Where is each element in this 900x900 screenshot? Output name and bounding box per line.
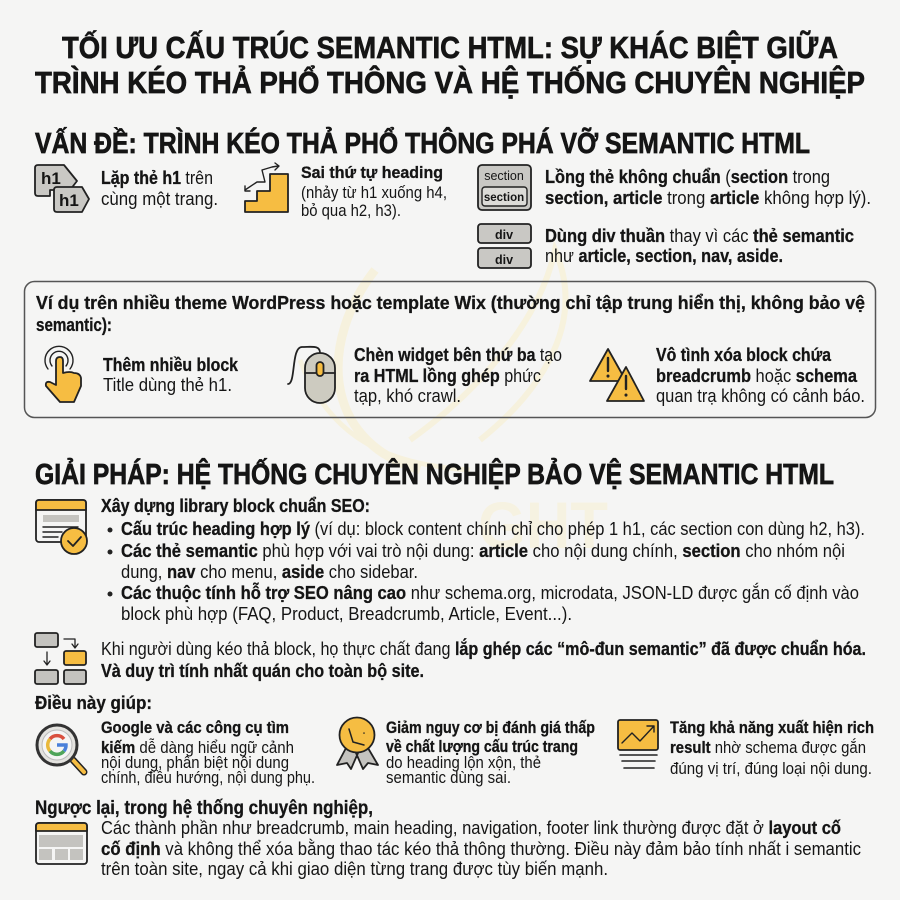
text: SEO block library: Các thẻ semantic phù hợp với vai trò nội dung: article cho nội dung chính, section cho nhóm nội bbox=[121, 541, 845, 561]
text: plain div: Dùng div thuần thay vì các thẻ semantic bbox=[545, 226, 854, 246]
icon: stairs bbox=[245, 163, 288, 212]
text: fixed layout explanation: Các thành phần như breadcrumb, main heading, navigation, footer link thường được đặt ở layout cố bbox=[101, 818, 841, 838]
text: wrong heading order: Sai thứ tự heading bbox=[301, 164, 443, 182]
text: repeated h1 bbox=[101, 168, 218, 209]
icon: duplicate h1 tags: h1 bbox=[59, 191, 79, 210]
icon: google magnifier bbox=[37, 725, 84, 772]
text: accidental delete: Vô tình xóa block chứa bbox=[656, 345, 832, 365]
icon: ribbon badge bbox=[337, 718, 378, 769]
icon: window with check bbox=[36, 500, 87, 554]
text: third-party widgets: Chèn widget bên thứ ba tạo bbox=[354, 345, 562, 365]
text: rich results: result nhờ schema được gắn bbox=[670, 738, 866, 757]
text: nesting bbox=[545, 167, 871, 208]
text: SEO block library: Cấu trúc heading hợp lý (ví dụ: block content chính chỉ cho phép 1 h1, các section con dùng h2, h3). bbox=[121, 519, 865, 539]
text: reduce risk: về chất lượng cấu trúc trang bbox=[386, 738, 578, 756]
icon: duplicate h1 tags bbox=[35, 165, 89, 212]
title bbox=[35, 29, 865, 100]
icon: mouse bbox=[288, 347, 335, 403]
text: accidental delete: breadcrumb hoặc schema bbox=[656, 366, 858, 386]
icon: tapping hand bbox=[45, 346, 81, 402]
text: rich results: Tăng khả năng xuất hiện rich bbox=[670, 719, 874, 737]
text: add blocks: Thêm nhiều block bbox=[103, 355, 239, 375]
icon: div boxes: div bbox=[495, 253, 513, 267]
panel intro text: semantic): bbox=[36, 315, 112, 335]
text: SEO block library bbox=[101, 496, 865, 624]
text: add blocks: Title dùng thẻ h1. bbox=[103, 375, 232, 395]
text: google understands: kiếm dễ dàng hiểu ngữ cảnh bbox=[101, 738, 294, 757]
text: semantic modules bbox=[101, 638, 866, 681]
text: SEO block library: Xây dựng library block chuẩn SEO: bbox=[101, 496, 370, 516]
panel intro text: Ví dụ trên nhiều theme WordPress hoặc template Wix (thường chỉ tập trung hiển thị, không bảo vệ bbox=[36, 293, 865, 313]
text: reduce risk: semantic dùng sai. bbox=[386, 769, 511, 787]
text: google understands: Google và các công cụ tìm bbox=[101, 719, 289, 737]
icon: growth chart bbox=[618, 720, 658, 768]
text: third-party widgets: ra HTML lồng ghép phức bbox=[354, 366, 541, 386]
text: wrong heading order: bỏ qua h2, h3). bbox=[301, 202, 401, 220]
panel: examples bbox=[24, 282, 876, 418]
text: wrong heading order bbox=[301, 164, 447, 220]
icon: nested section: section bbox=[484, 192, 524, 204]
heading: conversely: Ngược lại, trong hệ thống chuyên nghiệp, bbox=[35, 798, 373, 819]
icon: warning triangles bbox=[590, 349, 644, 401]
icon: fixed layout bbox=[36, 823, 87, 864]
text: google understands bbox=[101, 719, 315, 787]
text: wrong heading order: (nhảy từ h1 xuống h4, bbox=[301, 184, 447, 202]
text: add blocks bbox=[103, 355, 239, 395]
text: fixed layout explanation: trên toàn site, ngay cả khi giao diện từng trang được tùy biến mạnh. bbox=[101, 859, 608, 879]
text: accidental delete: quan trạ không có cảnh báo. bbox=[656, 386, 865, 406]
text: third-party widgets: tạp, khó crawl. bbox=[354, 386, 461, 406]
text: SEO block library: Các thuộc tính hỗ trợ SEO nâng cao như schema.org, microdata, JSON-LD được gắn cố định vào bbox=[121, 582, 859, 603]
text: SEO block library: dung, nav cho menu, aside cho sidebar. bbox=[121, 562, 418, 582]
icon: nested section bbox=[478, 165, 531, 210]
text: fixed layout explanation bbox=[101, 818, 861, 879]
watermark: GHT bbox=[478, 488, 608, 562]
panel intro text bbox=[36, 293, 865, 335]
icon: duplicate h1 tags: h1 bbox=[41, 169, 61, 188]
icon: nested section: section bbox=[484, 169, 524, 183]
text: nesting: section, article trong article không hợp lý). bbox=[545, 188, 871, 208]
heading: this helps: Điều này giúp: bbox=[35, 693, 152, 713]
text: google understands: nội dung, phân biệt nội dung bbox=[101, 754, 289, 772]
text: reduce risk bbox=[386, 719, 595, 787]
text: reduce risk: Giảm nguy cơ bị đánh giá thấp bbox=[386, 719, 595, 737]
text: google understands: chính, điều hướng, nội dung phụ. bbox=[101, 769, 315, 787]
text: repeated h1: cùng một trang. bbox=[101, 189, 218, 209]
text: SEO block library: block phù hợp (FAQ, Product, Breadcrumb, Article, Event...). bbox=[121, 604, 572, 624]
icon: div boxes: div bbox=[495, 228, 513, 242]
text: accidental delete bbox=[656, 345, 865, 406]
text: rich results: đúng vị trí, đúng loại nội dung. bbox=[670, 760, 872, 778]
text: semantic modules: Và duy trì tính nhất quán cho toàn bộ site. bbox=[101, 661, 424, 681]
text: third-party widgets bbox=[354, 345, 562, 406]
text: fixed layout explanation: cố định và không thể xóa bằng thao tác kéo thả thông thường. Điều này đảm bảo tính nhất i semantic bbox=[101, 838, 861, 859]
text: reduce risk: do heading lộn xộn, thẻ bbox=[386, 754, 541, 772]
icon: div boxes bbox=[478, 224, 531, 268]
text: plain div: như article, section, nav, aside. bbox=[545, 246, 783, 266]
watermark bbox=[300, 250, 608, 562]
text: semantic modules: Khi người dùng kéo thả block, họ thực chất đang lắp ghép các “mô-đun semantic” đã được chuẩn hóa. bbox=[101, 638, 866, 659]
text: rich results bbox=[670, 719, 874, 778]
text: repeated h1: Lặp thẻ h1 trên bbox=[101, 168, 213, 188]
text: plain div bbox=[545, 226, 854, 266]
icon: arranging modules bbox=[35, 633, 86, 684]
text: nesting: Lồng thẻ không chuẩn (section trong bbox=[545, 167, 830, 187]
